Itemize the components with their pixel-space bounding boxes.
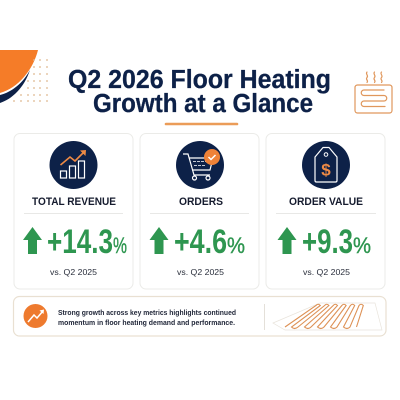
- title: [68, 66, 331, 118]
- value: +9.3%: +9.3: [302, 223, 353, 261]
- icon: price tag: [302, 141, 350, 189]
- corner decoration: [0, 50, 48, 103]
- value: +14.3%: %: [113, 233, 127, 258]
- comparison note: vs. Q2 2025: [177, 268, 225, 277]
- value: +14.3%: +14.3: [47, 223, 113, 261]
- icon: up arrow: [23, 227, 42, 254]
- label: total revenue: TOTAL REVENUE: [32, 196, 116, 208]
- label: order value: ORDER VALUE: [289, 196, 363, 208]
- icon: shopping cart: [176, 141, 224, 189]
- label: orders: ORDERS: [179, 196, 223, 208]
- comparison note: vs. Q2 2025: [50, 268, 98, 277]
- title: Growth at a Glance: [93, 90, 313, 118]
- panel: order value: [266, 134, 385, 289]
- icon: price tag: $: [321, 160, 331, 180]
- summary text: Strong growth across key metrics highlights continued: [58, 308, 236, 317]
- summary text: momentum in floor heating demand and performance.: [58, 318, 235, 327]
- panel: total revenue: [14, 134, 133, 289]
- value: +4.6%: %: [227, 233, 245, 258]
- icon: floor heating: [355, 72, 392, 113]
- panel: orders: [140, 134, 259, 289]
- value: +4.6%: +4.6: [174, 223, 227, 261]
- summary text: [58, 308, 236, 327]
- illustration: underfloor heating coil: [273, 303, 382, 330]
- title: Q2 2026 Floor Heating: [68, 66, 331, 94]
- title underline: [166, 123, 237, 125]
- comparison note: vs. Q2 2025: [303, 268, 351, 277]
- value: +9.3%: %: [353, 233, 371, 258]
- icon: rising bar chart: [50, 141, 98, 189]
- panel: summary banner: [14, 296, 386, 336]
- icon: up arrow: [150, 227, 168, 254]
- icon: up arrow: [278, 227, 296, 254]
- icon: growth arrow: [24, 304, 48, 328]
